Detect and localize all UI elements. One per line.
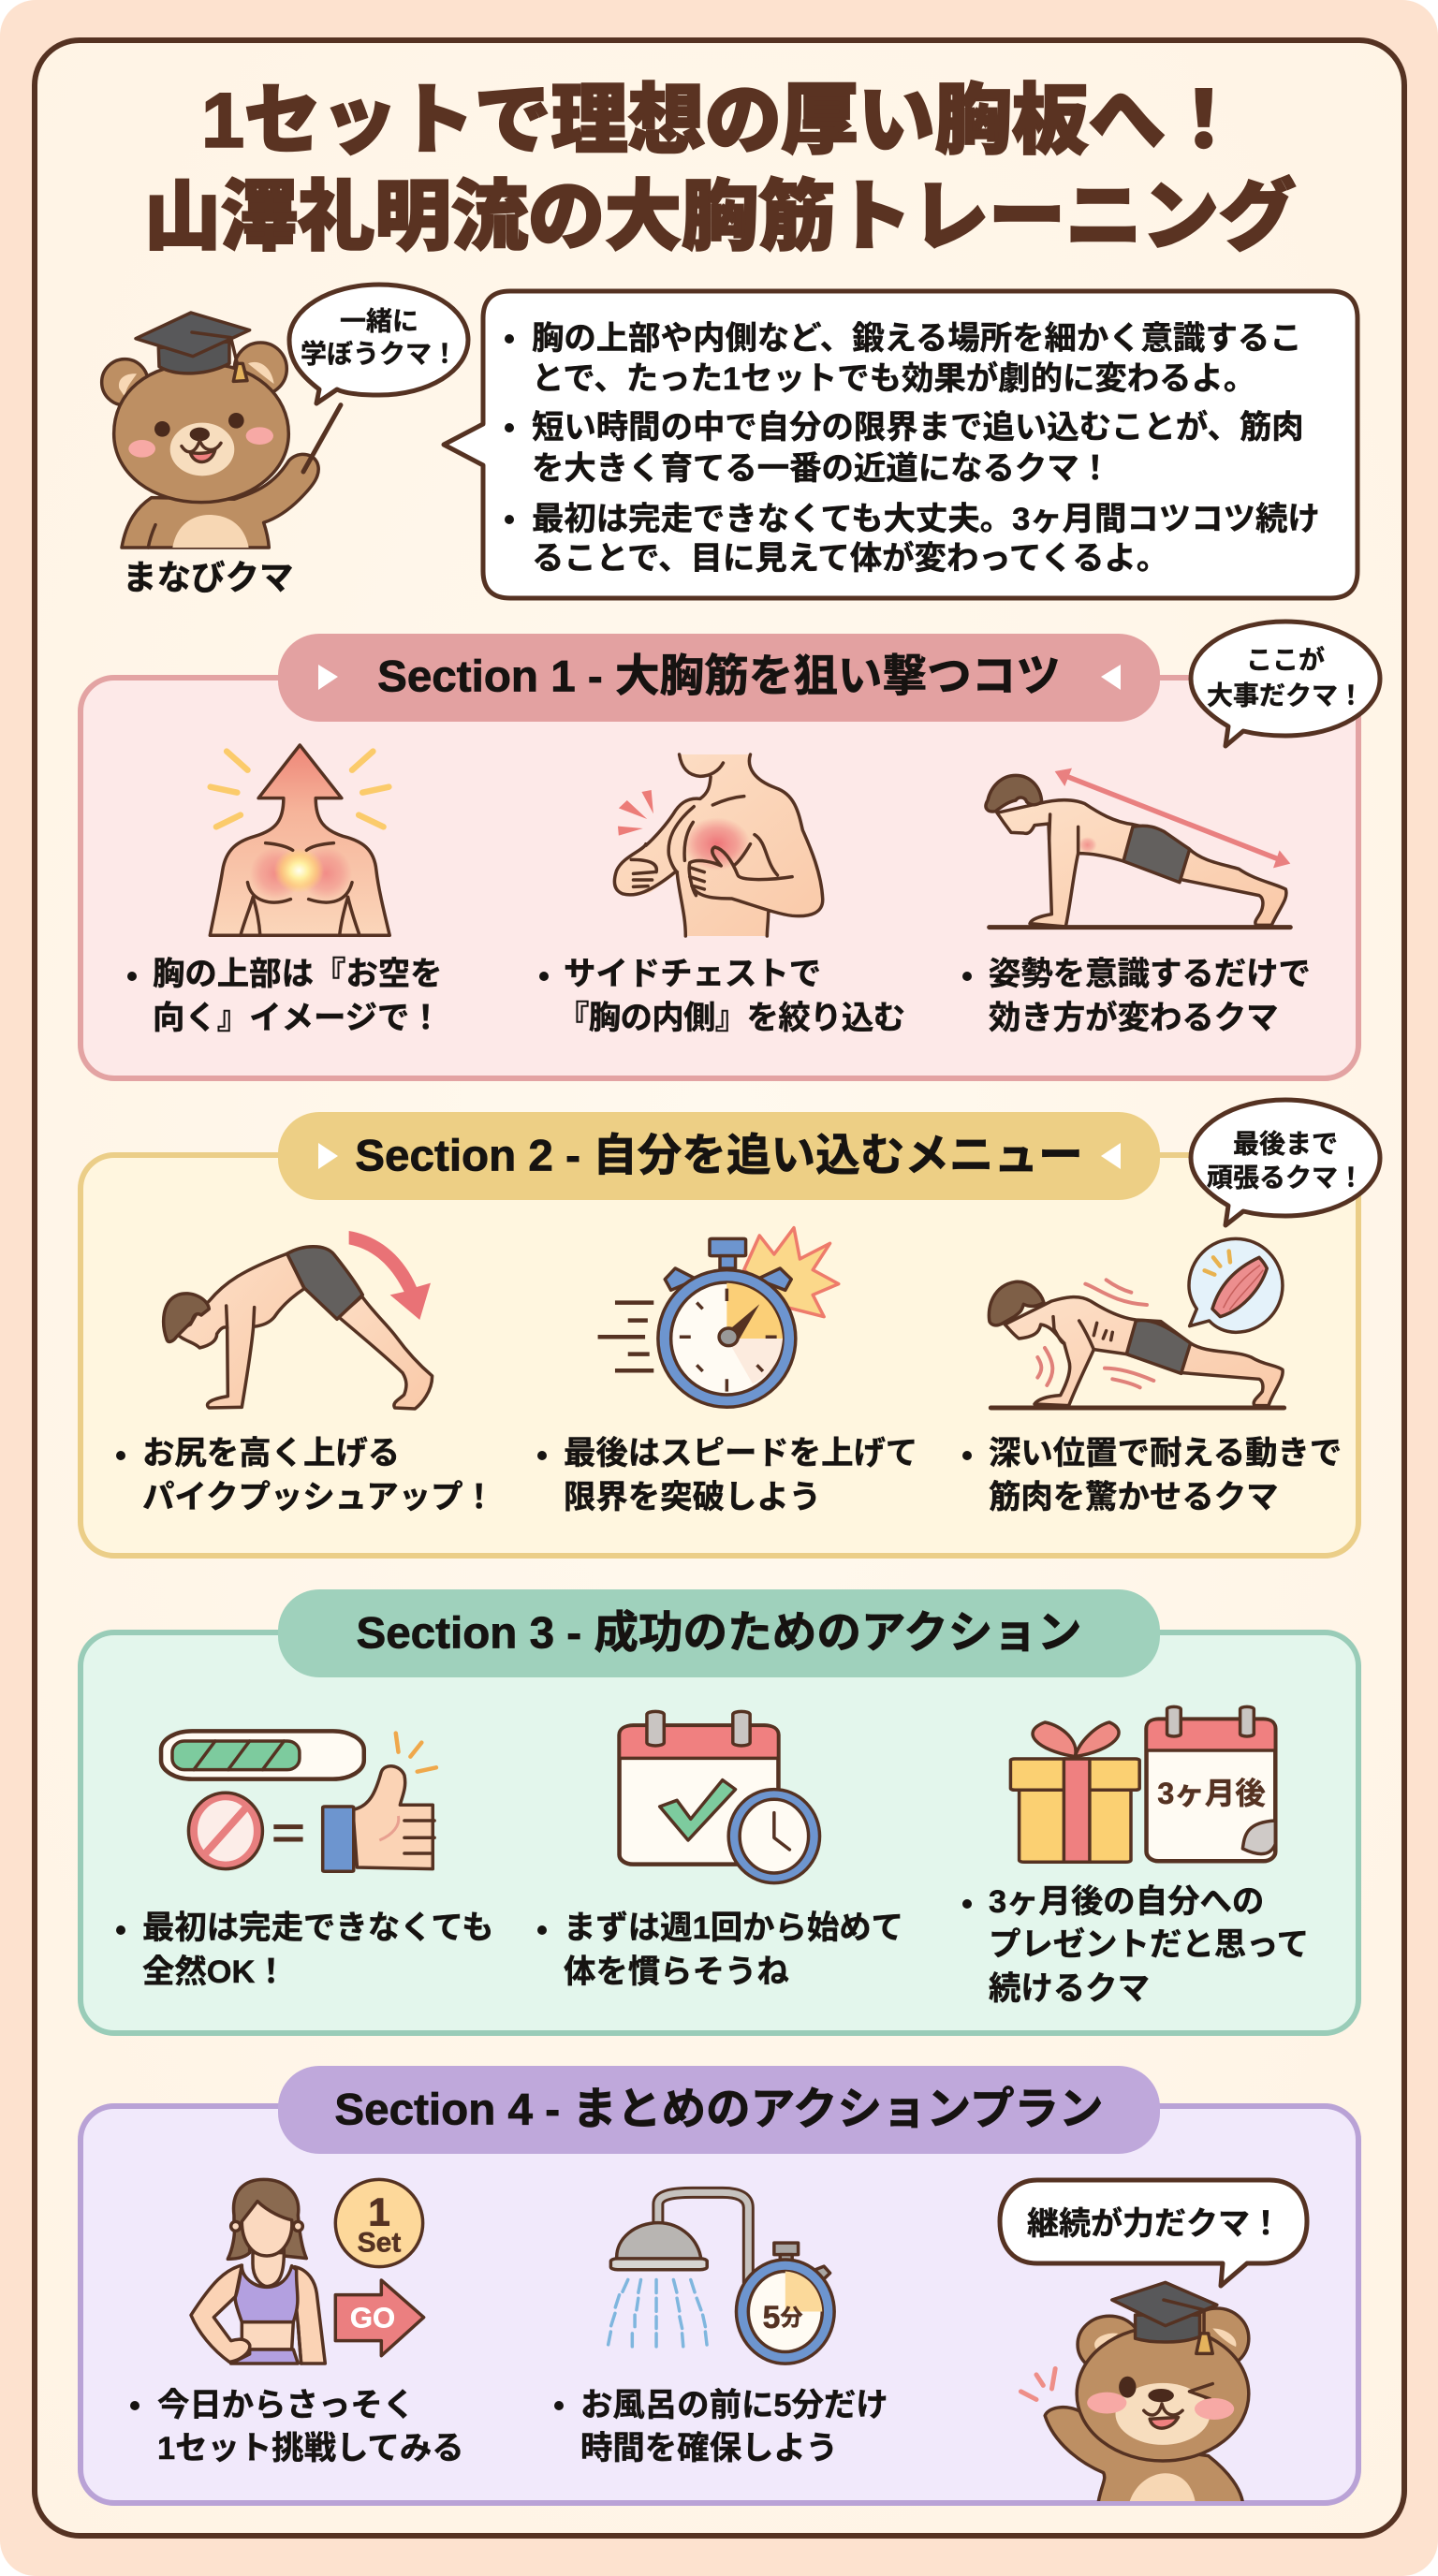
icon label: 1 Set: 1 — [368, 2190, 390, 2233]
bullet: don't need to finish: 全然OK！ — [142, 1954, 287, 1990]
bullet: today: 今日からさっそく — [157, 2388, 415, 2423]
section 1 heading — [278, 634, 1160, 722]
icon label: GO: GO — [350, 2301, 395, 2334]
bullet: don't need to finish: 最初は完走できなくても — [142, 1910, 494, 1946]
callout: important: 大事だクマ！ — [1207, 681, 1364, 710]
icon: calendar with clock — [620, 1711, 820, 1883]
bullet: side chest: サイドチェストで — [564, 957, 821, 992]
bullet: hold: 筋肉を驚かせるクマ — [989, 1480, 1279, 1515]
section 3 heading: Section 3 - 成功のためのアクション — [356, 1608, 1082, 1659]
bullet: present: 続けるクマ — [989, 1971, 1150, 2007]
bullet: posture: 姿勢を意識するだけで — [989, 957, 1311, 992]
bullet: hold: 深い位置で耐える動きで — [989, 1436, 1342, 1471]
bullet: today: 1セット挑戦してみる — [157, 2431, 464, 2466]
panel: section 1 — [81, 622, 1380, 1078]
bullet: hold — [962, 1436, 1342, 1515]
bullet: today — [130, 2388, 464, 2466]
intro text box: とで、たった1セットでも効果が劇的に変わるよ。 — [532, 360, 1255, 397]
section 2 heading: Section 2 - 自分を追い込むメニュー — [355, 1131, 1083, 1181]
section 3 heading — [278, 1589, 1160, 1677]
panel: section 4 — [81, 2066, 1358, 2503]
bullet: side chest: 『胸の内側』を絞り込む — [557, 1001, 905, 1036]
icon: woman with 1 set and GO — [191, 2179, 424, 2364]
timer label: 5分 — [763, 2300, 802, 2335]
speech bubble: learn together: 学ぼうクマ！ — [301, 339, 458, 369]
bullet: don't need to finish — [116, 1910, 494, 1990]
icon: shower and 5 minute timer — [607, 2192, 834, 2364]
section 1 heading: Section 1 - 大胸筋を狙い撃つコツ — [377, 651, 1061, 702]
bullet: side chest — [539, 957, 905, 1036]
intro text box: 短い時間の中で自分の限界まで追い込むことが、筋肉 — [532, 409, 1304, 446]
intro text box: ることで、目に見えて体が変わってくるよ。 — [532, 540, 1168, 577]
speech bubble: learn together — [289, 285, 468, 403]
icon: upper chest arrow — [210, 745, 389, 935]
title: 1セットで理想の厚い胸板へ！ — [201, 79, 1242, 163]
bullet: speed — [537, 1436, 917, 1515]
bullet: before bath: お風呂の前に5分だけ — [580, 2388, 888, 2423]
icon: gift and calendar — [1010, 1706, 1275, 1862]
bullet: speed: 限界を突破しよう — [564, 1480, 821, 1515]
bullet: present: プレゼントだと思って — [989, 1927, 1309, 1963]
icon: plank posture — [986, 768, 1290, 928]
icon label: 1 Set: Set — [358, 2228, 401, 2258]
icon: pike push-up — [164, 1231, 433, 1409]
bullet: pike: パイクプッシュアップ！ — [142, 1480, 495, 1515]
section 4 heading — [278, 2066, 1160, 2154]
section 2 heading — [278, 1112, 1160, 1200]
callout: do your best — [1191, 1100, 1380, 1225]
section 4 heading: Section 4 - まとめのアクションプラン — [334, 2086, 1104, 2134]
title — [144, 79, 1296, 260]
bullet: upper chest: 向く』イメージで！ — [153, 1001, 442, 1036]
mascot: teaching bear — [102, 313, 341, 548]
intro text box: 最初は完走できなくても大丈夫。3ヶ月間コツコツ続け — [532, 502, 1320, 537]
bullet: before bath — [554, 2388, 888, 2466]
intro text box: を大きく育てる一番の近道になるクマ！ — [532, 451, 1111, 487]
title: 山澤礼明流の大胸筋トレーニング — [144, 174, 1296, 260]
icon: progress bar and thumbs up — [161, 1731, 436, 1871]
bullet: before bath: 時間を確保しよう — [580, 2431, 838, 2466]
mascot: waving bear — [1020, 2282, 1249, 2503]
intro text box: 胸の上部や内側など、鍛える場所を細かく意識するこ — [532, 321, 1302, 357]
bullet: upper chest: 胸の上部は『お空を — [153, 957, 443, 992]
bullet: posture — [962, 957, 1311, 1036]
bullet: weekly: 体を慣らそうね — [564, 1954, 789, 1990]
bullet: upper chest — [127, 957, 443, 1036]
callout: important — [1191, 622, 1380, 746]
bullet: posture: 効き方が変わるクマ — [989, 1000, 1279, 1036]
icon: deep push-up with muscle — [989, 1238, 1284, 1408]
bullet: present: 3ヶ月後の自分への — [989, 1884, 1264, 1920]
intro text box — [444, 291, 1357, 598]
speech bubble: learn together: 一緒に — [340, 307, 418, 335]
callout: keep going — [1000, 2180, 1307, 2286]
callout: do your best: 最後まで — [1233, 1129, 1338, 1159]
callout: important: ここが — [1246, 644, 1325, 674]
bullet: weekly: まずは週1回から始めて — [564, 1910, 903, 1946]
panel: section 3 — [81, 1589, 1358, 2033]
mascot name: まなびクマ — [123, 558, 294, 597]
callout: do your best: 頑張るクマ！ — [1207, 1163, 1364, 1193]
bullet: pike: お尻を高く上げる — [142, 1436, 400, 1471]
icon: side chest — [614, 754, 823, 936]
bullet: speed: 最後はスピードを上げて — [564, 1436, 917, 1471]
bullet: present — [962, 1884, 1309, 2007]
panel: section 2 — [81, 1100, 1380, 1556]
icon: stopwatch — [598, 1228, 839, 1407]
bullet: pike — [116, 1436, 495, 1515]
calendar label: 3ヶ月後 — [1157, 1777, 1266, 1810]
icon label: 1 Set — [358, 2190, 401, 2258]
bullet: weekly — [537, 1910, 903, 1990]
callout: keep going: 継続が力だクマ！ — [1027, 2205, 1282, 2242]
